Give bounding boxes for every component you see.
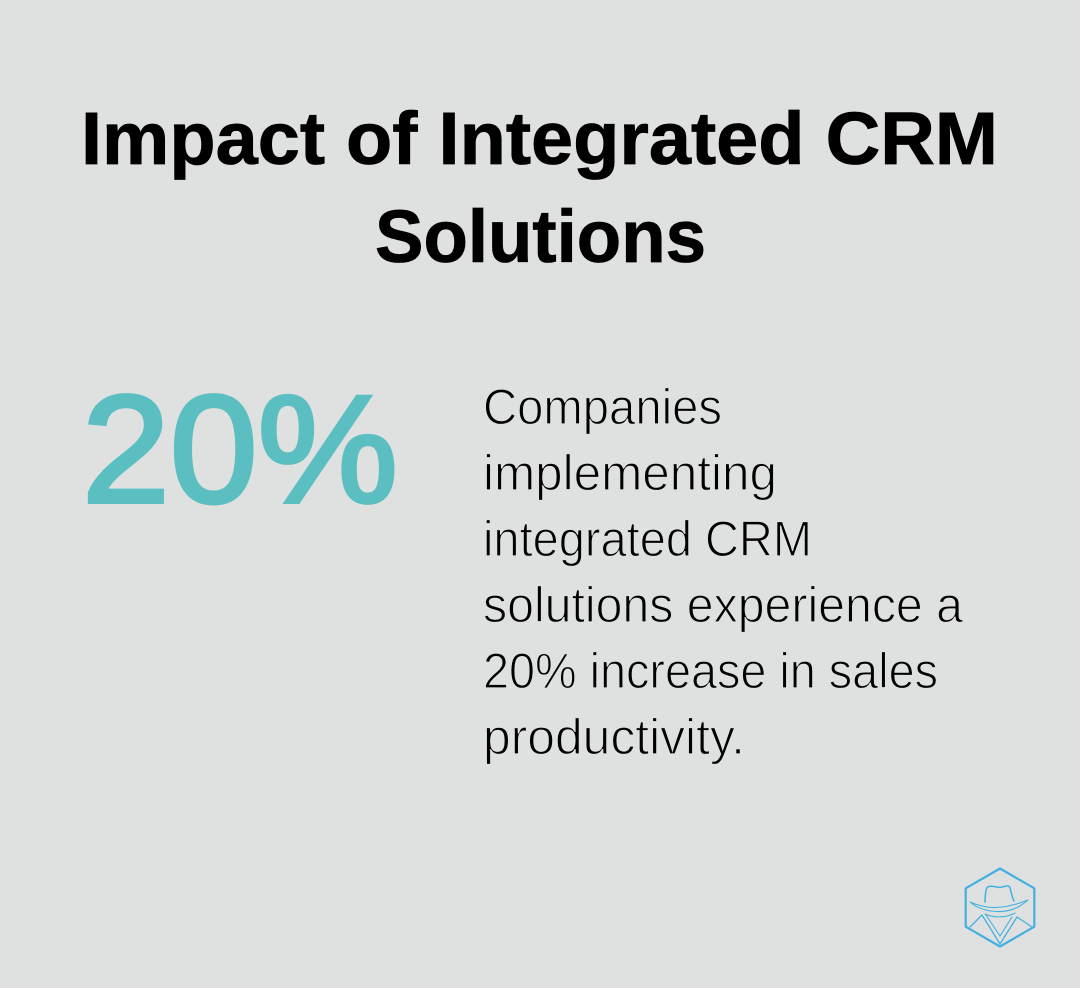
description text: Companies bbox=[483, 379, 722, 435]
title: Solutions bbox=[375, 195, 706, 278]
title bbox=[81, 97, 998, 278]
big stat: 20%: 20% bbox=[82, 364, 398, 535]
icon: logo hexagon with hat and collar bbox=[966, 868, 1034, 946]
description text bbox=[483, 379, 963, 765]
title: Impact of Integrated CRM bbox=[81, 97, 998, 180]
description text: solutions experience a bbox=[483, 577, 963, 633]
description text: 20% increase in sales bbox=[483, 643, 938, 699]
description text: implementing bbox=[483, 445, 777, 501]
description text: integrated CRM bbox=[483, 511, 812, 567]
description text: productivity. bbox=[483, 709, 745, 765]
